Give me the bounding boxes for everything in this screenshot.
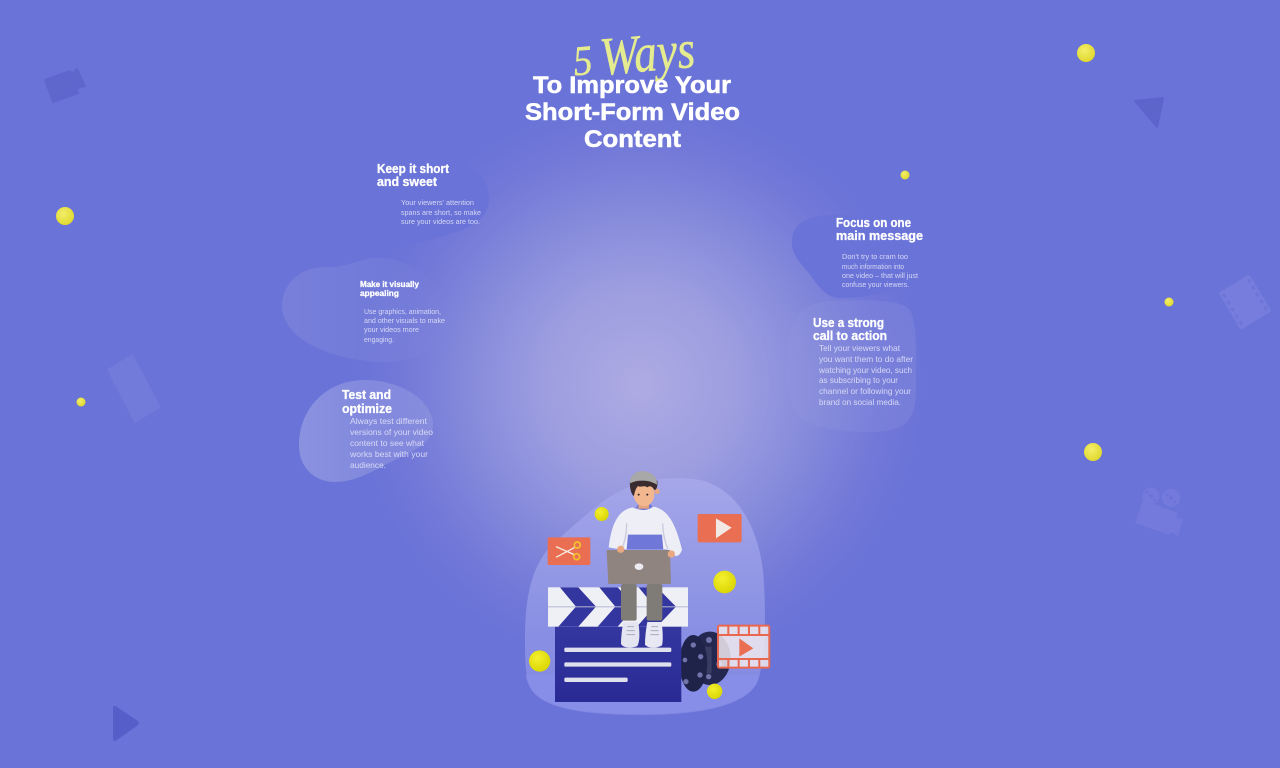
heading: Keep it short — [377, 162, 450, 176]
body text: Use graphics, animation, — [364, 307, 441, 316]
body text: content to see what — [350, 438, 425, 448]
clapper stick — [548, 587, 688, 627]
icon: film strip with play — [718, 626, 769, 668]
body text: confuse your viewers. — [842, 280, 909, 289]
heading — [836, 216, 923, 243]
body text: versions of your video — [350, 427, 433, 437]
heading: call to action — [813, 329, 887, 343]
backdrop blob — [525, 478, 765, 715]
body text: your videos more — [364, 325, 419, 334]
heading: and sweet — [377, 175, 438, 189]
icon: play triangle — [113, 706, 139, 741]
panel: make it visually appealing — [282, 258, 447, 362]
main heading: To Improve Your — [533, 72, 731, 99]
heading: optimize — [342, 402, 392, 416]
icon: film strip — [1218, 274, 1272, 330]
heading: main message — [836, 229, 923, 243]
body text: Your viewers' attention — [401, 198, 474, 207]
eyes — [638, 494, 640, 496]
heading — [342, 388, 392, 416]
body text — [364, 307, 445, 344]
panel: test and optimize — [299, 380, 433, 482]
sweater — [609, 507, 682, 556]
hair — [630, 481, 657, 496]
body text: watching your video, such — [818, 366, 912, 375]
clapperboard body — [555, 627, 681, 702]
icon: play card — [698, 514, 742, 542]
decorative balls — [56, 44, 1174, 461]
shoes — [621, 622, 639, 648]
body text — [842, 252, 918, 289]
title — [525, 19, 740, 153]
icon: film projector — [1135, 488, 1183, 536]
body text — [401, 198, 481, 226]
central glow — [355, 100, 925, 670]
script heading: 5 Ways — [571, 19, 697, 89]
body text: one video – that will just — [842, 271, 918, 280]
blob — [353, 164, 489, 250]
laptop — [607, 550, 671, 584]
body text: much information into — [842, 262, 904, 271]
illustration balls — [529, 507, 736, 699]
body text: brand on social media. — [819, 398, 901, 407]
body text: you want them to do after — [819, 355, 913, 364]
person — [607, 471, 682, 648]
heading: Use a strong — [813, 316, 884, 330]
icon: ticket — [109, 356, 159, 421]
floor — [526, 675, 759, 714]
blob — [282, 258, 447, 362]
heading — [360, 279, 419, 298]
cap — [630, 471, 657, 485]
heading — [813, 316, 887, 343]
body text — [818, 344, 913, 407]
main heading: Short-Form Video — [525, 99, 740, 126]
body text: Don't try to cram too — [842, 252, 908, 261]
board lines — [564, 648, 671, 682]
heading — [377, 162, 450, 189]
script heading: 5 Ways: 5 — [571, 38, 594, 85]
body text: audience. — [350, 460, 386, 470]
panel: focus on one main message — [792, 215, 925, 298]
neck and head — [638, 501, 649, 509]
body text: engaging. — [364, 335, 394, 344]
panel: use a strong call to action — [787, 300, 916, 432]
blob — [299, 380, 433, 482]
icon: scissors card — [548, 537, 590, 565]
heading: Make it visually — [360, 279, 419, 289]
body text — [349, 416, 433, 470]
film reel — [679, 632, 731, 692]
heading: Test and — [342, 388, 391, 402]
icon: video camera — [45, 69, 85, 102]
illustration: creator on clapperboard — [525, 471, 769, 715]
body text: channel or following your — [819, 387, 911, 396]
blob — [792, 215, 925, 298]
script heading: 5 Ways: Ways — [597, 19, 697, 87]
main heading — [525, 72, 740, 153]
heading: appealing — [360, 288, 399, 298]
body text: as subscribing to your — [819, 376, 898, 385]
body text: Tell your viewers what — [819, 344, 901, 353]
body text: spans are short, so make — [401, 208, 481, 217]
body text: Always test different — [350, 416, 428, 426]
panel: keep it short and sweet — [353, 162, 489, 250]
blob — [787, 300, 916, 432]
body text: sure your videos are too. — [401, 217, 480, 226]
heading: Focus on one — [836, 216, 911, 230]
body text: works best with your — [349, 449, 428, 459]
legs — [621, 584, 637, 621]
main heading: Content — [584, 126, 681, 153]
hands — [617, 546, 624, 553]
icon: triangle top right — [1135, 98, 1163, 127]
body text: and other visuals to make — [364, 316, 445, 325]
